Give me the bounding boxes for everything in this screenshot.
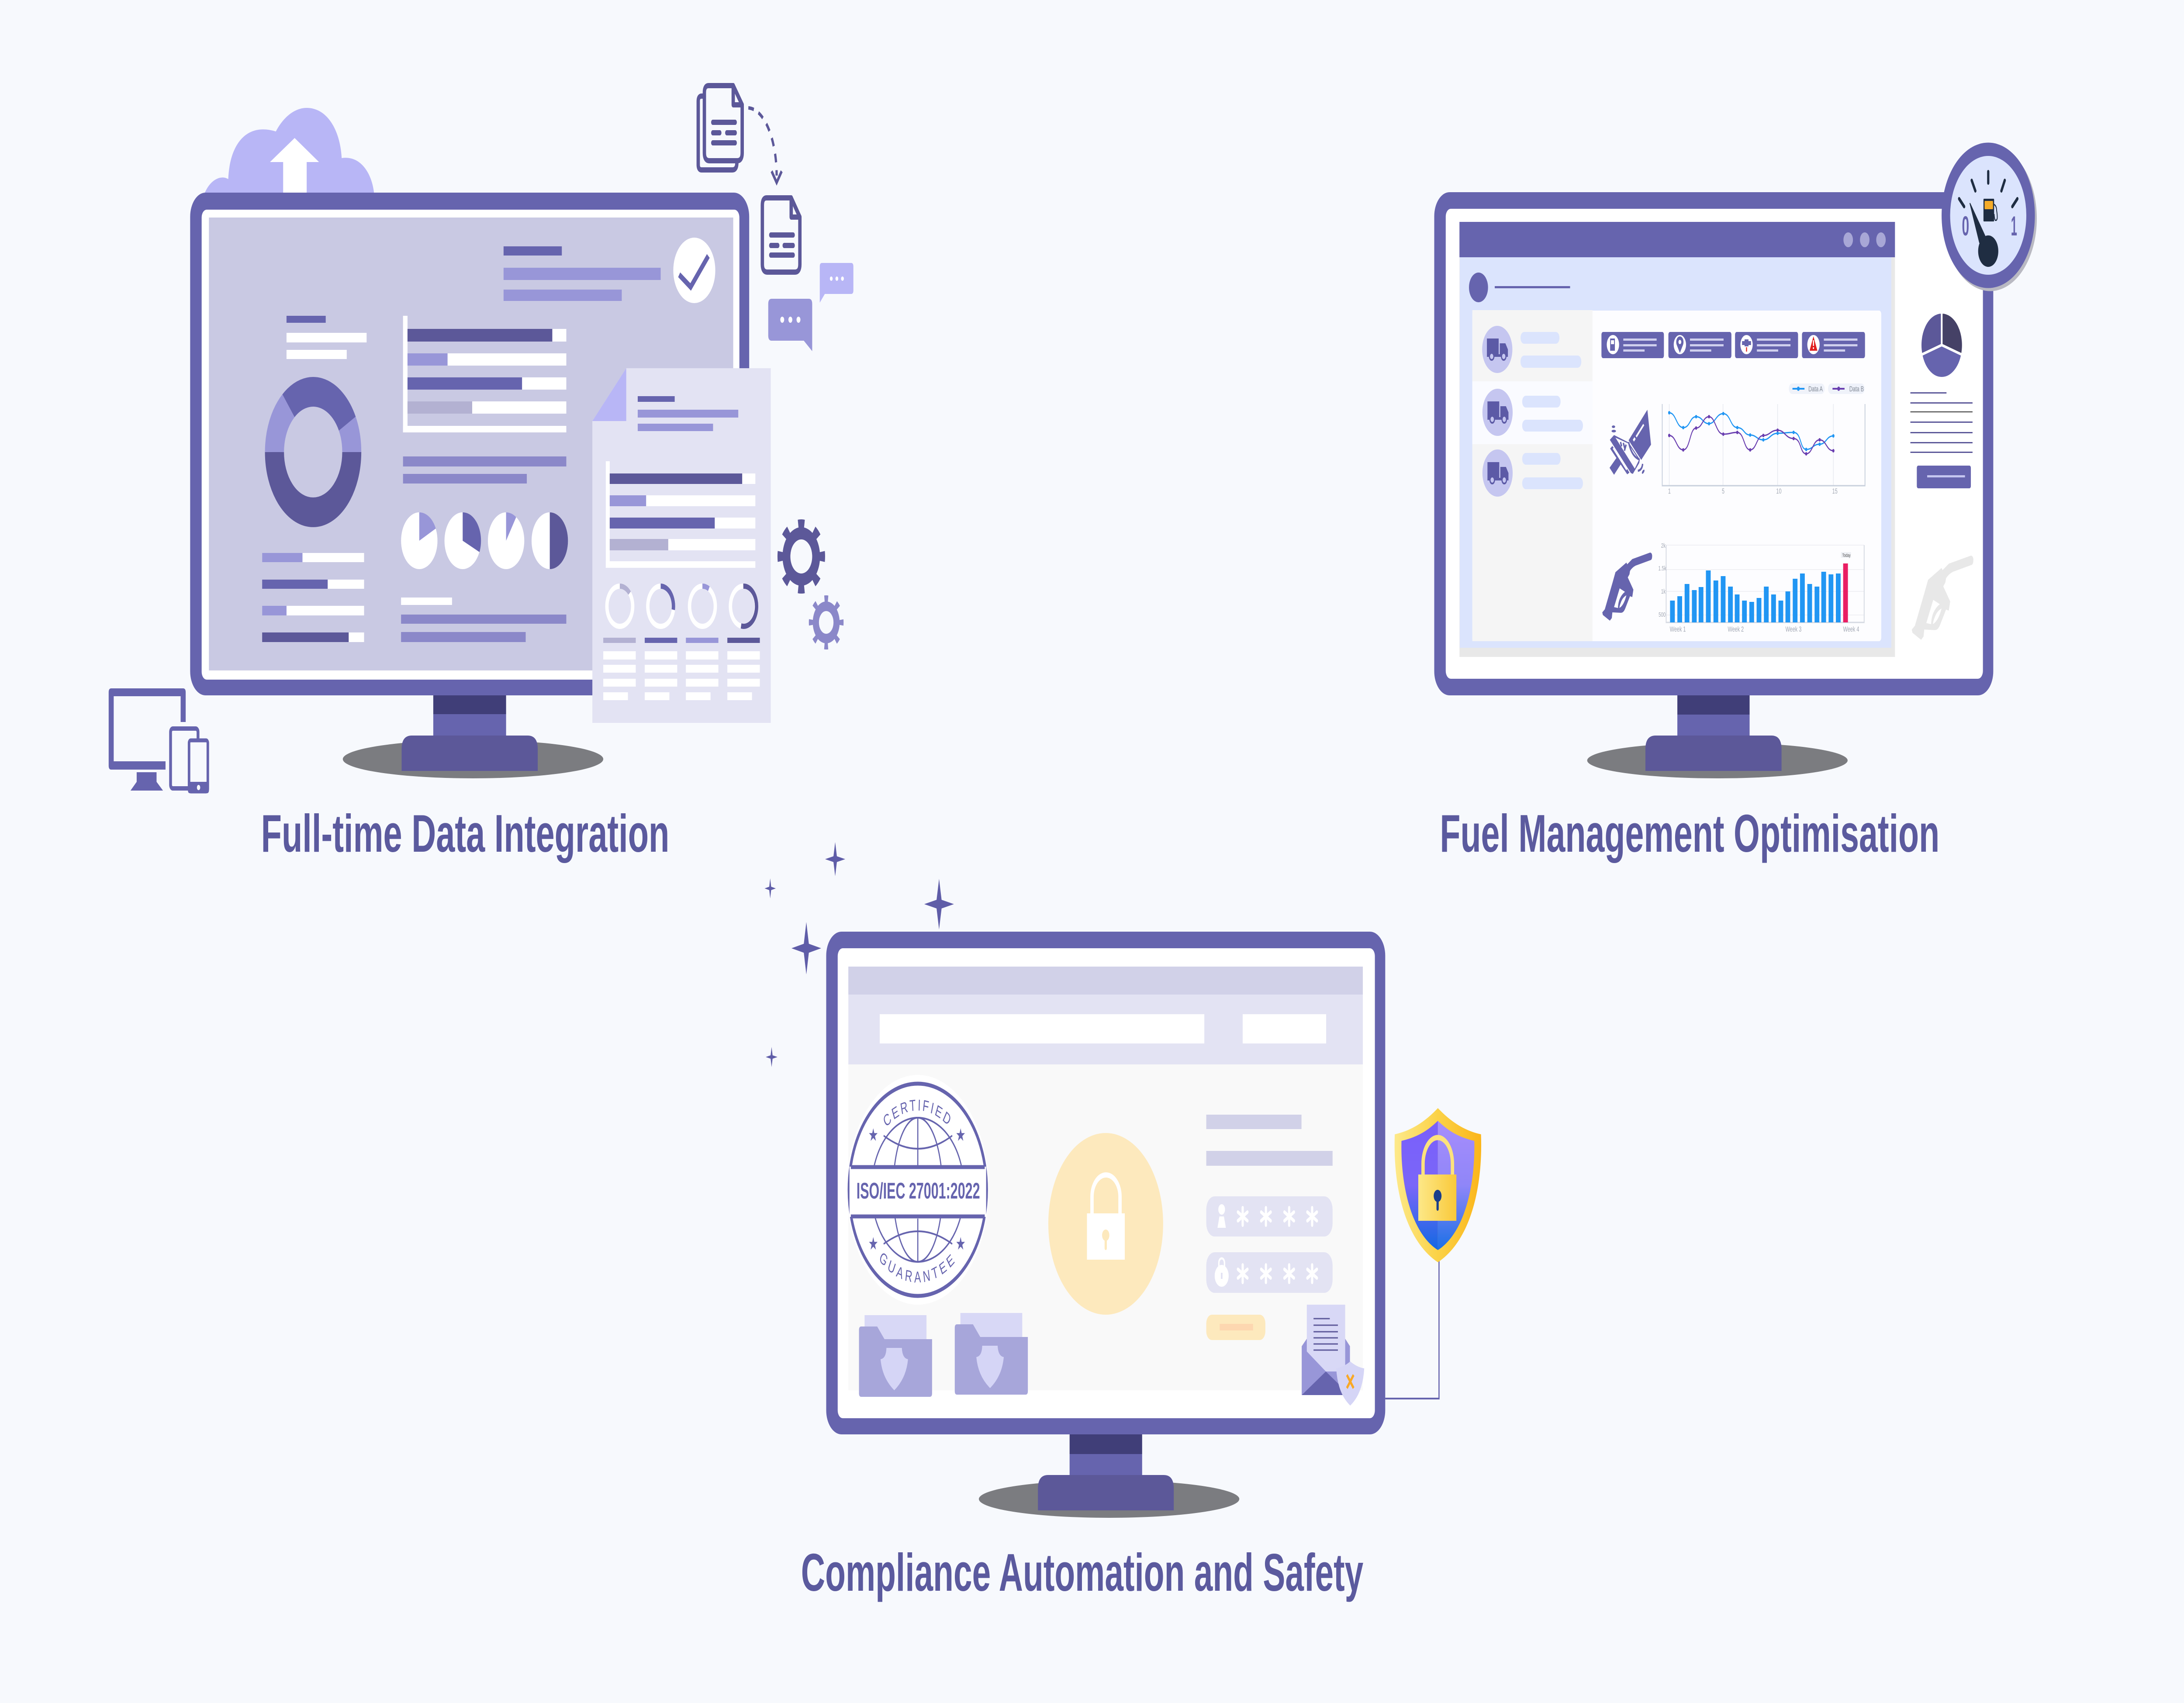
line chart: 10 bbox=[1776, 487, 1782, 496]
panel: fuel management optimisation bbox=[1434, 142, 2037, 863]
card: leak bbox=[1735, 332, 1798, 358]
bar chart: Week 4 bbox=[1843, 625, 1859, 634]
icon: fuel pump bbox=[1984, 199, 1997, 221]
horizontal bar chart bbox=[403, 316, 566, 432]
certification badge: GUARANTEE bbox=[877, 1249, 958, 1286]
bar chart bbox=[1658, 542, 1864, 634]
side pie chart bbox=[1921, 312, 1963, 378]
certification badge: ISO/IEC 27001:2022 bbox=[857, 1178, 980, 1204]
donut chart bbox=[274, 392, 352, 512]
monitor screen bbox=[1446, 209, 1983, 679]
monitor frame bbox=[1434, 192, 1993, 695]
icon: small gear bbox=[811, 599, 841, 646]
monitor screen bbox=[202, 210, 740, 680]
heading: compliance automation and safety: Compliance Automation and Safety bbox=[801, 1542, 1363, 1602]
icon: secure envelope bbox=[1302, 1305, 1364, 1406]
icon: devices bbox=[109, 688, 209, 793]
certification badge: CERTIFIED bbox=[881, 1097, 954, 1130]
bar chart: 2k bbox=[1661, 542, 1666, 549]
connector line bbox=[1385, 1260, 1439, 1399]
caption bars bbox=[403, 456, 566, 484]
status cards bbox=[1601, 332, 1865, 358]
chart legend bbox=[1789, 383, 1865, 394]
side button bbox=[1917, 466, 1971, 488]
bar chart: Week 1 bbox=[1670, 625, 1686, 634]
certification badge: ★ bbox=[956, 1126, 966, 1145]
document bar chart bbox=[606, 461, 755, 568]
monitor stand bbox=[979, 1431, 1239, 1518]
fuel gauge: 0 bbox=[1962, 211, 1969, 242]
certification badge: ★ bbox=[956, 1234, 966, 1254]
line chart bbox=[1662, 383, 1865, 496]
icon: security shield bbox=[1395, 1108, 1481, 1262]
line chart: 15 bbox=[1832, 487, 1838, 496]
panel: full-time data integration bbox=[109, 86, 854, 863]
bar chart: Today bbox=[1842, 553, 1851, 558]
bar chart: 1k bbox=[1661, 588, 1666, 595]
bar chart: 500 bbox=[1659, 611, 1666, 618]
line chart: 1 bbox=[1668, 487, 1671, 496]
icon: folder one bbox=[859, 1315, 932, 1397]
search header bbox=[848, 967, 1363, 1064]
password field bbox=[1206, 1252, 1333, 1293]
line chart: 5 bbox=[1722, 487, 1724, 496]
icon: chat bubbles bbox=[768, 263, 854, 351]
monitor frame bbox=[826, 932, 1385, 1434]
login form bbox=[1206, 1115, 1333, 1340]
icon: single document bbox=[762, 198, 800, 272]
card: fuel bbox=[1601, 332, 1664, 358]
certification badge bbox=[847, 1075, 988, 1305]
gauge needle bbox=[1970, 204, 1998, 267]
bar chart: 1.5k bbox=[1658, 565, 1666, 572]
sparkles bbox=[764, 842, 954, 1067]
heading: fuel management optimisation: Fuel Management Optimisation bbox=[1440, 803, 1939, 863]
chart legend: Data A bbox=[1808, 385, 1823, 394]
bar chart: Week 3 bbox=[1786, 625, 1801, 634]
heading: full-time data integration: Full-time Data Integration bbox=[261, 803, 669, 863]
vehicle row 3 bbox=[1482, 449, 1583, 497]
monitor stand bbox=[1587, 692, 1848, 778]
vehicle list bbox=[1472, 310, 1593, 641]
heading bars bbox=[504, 246, 661, 301]
icon: cloud upload bbox=[204, 108, 374, 194]
text bars above donut bbox=[287, 316, 366, 359]
pie charts bbox=[401, 512, 568, 569]
data table bbox=[603, 638, 760, 700]
bar chart: Week 2 bbox=[1728, 625, 1744, 634]
globe top bbox=[874, 1117, 962, 1165]
side text lines bbox=[1911, 392, 1973, 453]
arrow: dashed copy arrow bbox=[748, 108, 782, 183]
lower text bars bbox=[401, 598, 566, 642]
panel: compliance automation and safety bbox=[764, 842, 1481, 1602]
vehicle row 1 bbox=[1482, 326, 1581, 373]
icon: large gear bbox=[781, 524, 822, 589]
certification badge: ★ bbox=[868, 1126, 878, 1145]
icon: fuel nozzle bbox=[1602, 553, 1652, 621]
icon: central padlock bbox=[1048, 1133, 1163, 1315]
username field bbox=[1206, 1196, 1333, 1237]
fuel gauge: 1 bbox=[2011, 211, 2017, 242]
icon: ghost fuel nozzle bbox=[1912, 556, 1973, 640]
monitor stand bbox=[343, 692, 603, 778]
monitor frame bbox=[190, 193, 749, 695]
login button bbox=[1206, 1315, 1265, 1340]
globe bottom bbox=[874, 1219, 961, 1263]
progress bars bbox=[262, 553, 364, 642]
report document bbox=[592, 368, 771, 723]
icon: stacked documents bbox=[698, 86, 742, 170]
icon: folder two bbox=[955, 1313, 1028, 1395]
vehicle row 2 bbox=[1482, 389, 1583, 436]
card: alert bbox=[1802, 332, 1865, 358]
chart legend: Data B bbox=[1849, 385, 1864, 394]
dashboard window bbox=[1459, 222, 1895, 657]
fuel gauge bbox=[1942, 142, 2037, 291]
icon: check mark bbox=[673, 238, 715, 303]
monitor screen bbox=[838, 948, 1375, 1418]
card: location bbox=[1669, 332, 1731, 358]
progress rings bbox=[607, 586, 757, 626]
icon: wiper blade bbox=[1610, 410, 1651, 475]
certification badge: ★ bbox=[868, 1234, 878, 1254]
